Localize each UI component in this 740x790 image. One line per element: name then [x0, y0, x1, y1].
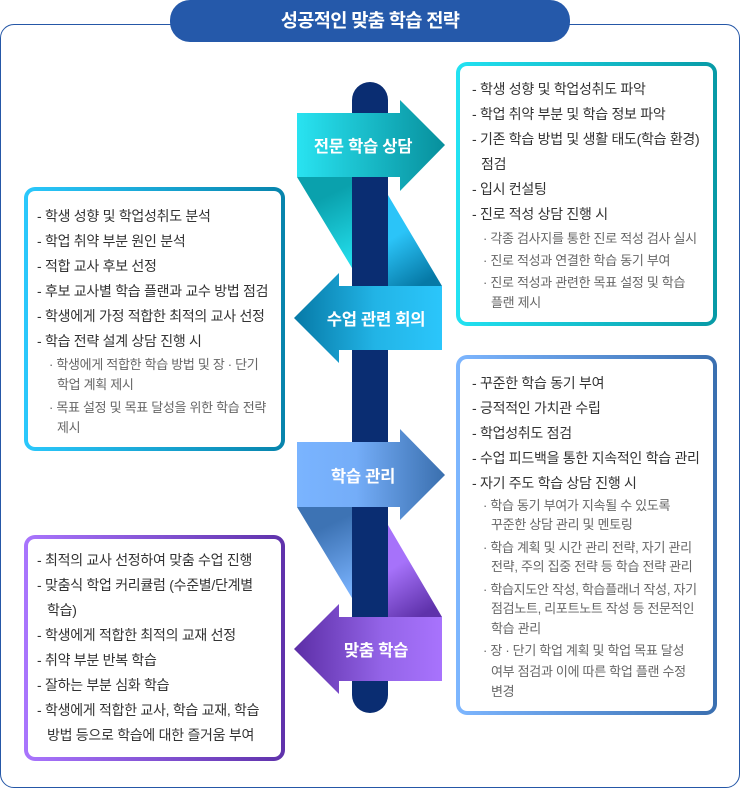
text block: 학습 관리 내용: - 긍적적인 가치관 수립: [472, 400, 601, 416]
fold: 전문 학습 상담: [297, 177, 352, 268]
text block: 맞춤 학습 내용: - 학생에게 적합한 최적의 교재 선정: [37, 627, 236, 643]
text block: 학습 관리 내용: 점검노트, 리포트노트 작성 등 전문적인: [491, 601, 694, 616]
text block: 전문 학습 상담 내용: · 각종 검사지를 통한 진로 적성 검사 실시: [483, 231, 697, 246]
text block: 수업 관련 회의 내용: [37, 208, 268, 435]
text block: 맞춤 학습 내용: 학습): [47, 602, 77, 618]
signpost pole: [352, 82, 388, 713]
text block: 수업 관련 회의 내용: - 학생에게 가정 적합한 최적의 교사 선정: [37, 308, 265, 324]
text block: 수업 관련 회의 내용: 제시: [57, 420, 80, 435]
text block: 맞춤 학습 내용: - 학생에게 적합한 교사, 학습 교재, 학습: [37, 702, 259, 718]
text block: 학습 관리 내용: 꾸준한 상담 관리 및 멘토링: [491, 517, 633, 532]
panel: 수업 관련 회의: [24, 187, 285, 451]
arrow: 전문 학습 상담: 전문 학습 상담: [314, 137, 412, 156]
text block: 맞춤 학습 내용: - 최적의 교사 선정하여 맞춤 수업 진행: [37, 552, 252, 568]
title: [170, 0, 570, 42]
text block: 전문 학습 상담 내용: - 진로 적성 상담 진행 시: [472, 206, 608, 222]
text block: 학습 관리 내용: - 학업성취도 점검: [472, 425, 572, 441]
text block: 학습 관리 내용: · 학습 동기 부여가 지속될 수 있도록: [483, 498, 670, 513]
text block: 학습 관리 내용: 여부 점검과 이에 따른 학업 플랜 수정: [491, 664, 686, 679]
text block: 학습 관리 내용: 전략, 주의 집중 전략 등 학습 전략 관리: [491, 559, 692, 574]
arrow: 학습 관리: [297, 429, 445, 520]
text block: 전문 학습 상담 내용: - 학업 취약 부분 및 학습 정보 파악: [472, 106, 665, 122]
text block: 학습 관리 내용: 학습 관리: [491, 621, 541, 636]
text block: 수업 관련 회의 내용: · 학생에게 적합한 학습 방법 및 장 · 단기: [49, 357, 258, 372]
text block: 맞춤 학습 내용: [37, 552, 259, 743]
fold: 수업 관련 회의: [388, 195, 442, 286]
arrow: 학습 관리: 학습 관리: [331, 467, 395, 486]
text block: 수업 관련 회의 내용: · 목표 설정 및 목표 달성을 위한 학습 전략: [49, 400, 266, 415]
text block: 학습 관리 내용: 변경: [491, 684, 514, 699]
arrow: 전문 학습 상담: [297, 100, 445, 191]
title: 성공적인 맞춤 학습 전략: [281, 10, 459, 31]
text block: 전문 학습 상담 내용: - 학생 성향 및 학업성취도 파악: [472, 81, 646, 97]
panel: 학습 관리: [456, 355, 717, 715]
text block: 맞춤 학습 내용: - 잘하는 부분 심화 학습: [37, 677, 169, 693]
panel: 맞춤 학습: [24, 535, 285, 761]
text block: 수업 관련 회의 내용: - 학생 성향 및 학업성취도 분석: [37, 208, 211, 224]
text block: 수업 관련 회의 내용: - 학습 전략 설계 상담 진행 시: [37, 333, 202, 349]
text block: 수업 관련 회의 내용: 학업 계획 제시: [57, 377, 134, 392]
text block: 학습 관리 내용: - 자기 주도 학습 상담 진행 시: [472, 475, 637, 491]
arrow: 수업 관련 회의: 수업 관련 회의: [327, 310, 425, 329]
fold: 학습 관리: [297, 507, 352, 598]
arrow: 맞춤 학습: 맞춤 학습: [344, 641, 408, 660]
arrow: 맞춤 학습: [294, 604, 442, 694]
text block: 수업 관련 회의 내용: - 적합 교사 후보 선정: [37, 258, 157, 274]
fold: 맞춤 학습: [388, 525, 442, 617]
text block: 전문 학습 상담 내용: 점검: [481, 156, 506, 172]
text block: 맞춤 학습 내용: - 맞춤식 학업 커리큘럼 (수준별/단계별: [37, 577, 253, 593]
text block: 학습 관리 내용: - 수업 피드백을 통한 지속적인 학습 관리: [472, 450, 700, 466]
text block: 전문 학습 상담 내용: - 기존 학습 방법 및 생활 태도(학습 환경): [472, 131, 699, 147]
text block: 수업 관련 회의 내용: - 후보 교사별 학습 플랜과 교수 방법 점검: [37, 283, 268, 299]
text block: 학습 관리 내용: · 학습지도안 작성, 학습플래너 작성, 자기: [483, 582, 697, 597]
text block: 학습 관리 내용: - 꾸준한 학습 동기 부여: [472, 375, 604, 391]
arrow: 수업 관련 회의: [294, 273, 442, 363]
text block: 맞춤 학습 내용: 방법 등으로 학습에 대한 즐거움 부여: [47, 727, 254, 743]
text block: 전문 학습 상담 내용: - 입시 컨설팅: [472, 181, 547, 197]
text block: 수업 관련 회의 내용: - 학업 취약 부분 원인 분석: [37, 233, 185, 249]
text block: 학습 관리 내용: [472, 375, 700, 699]
text block: 전문 학습 상담 내용: 플랜 제시: [491, 295, 541, 310]
text block: 전문 학습 상담 내용: [472, 81, 699, 310]
text block: 학습 관리 내용: · 장 · 단기 학업 계획 및 학업 목표 달성: [483, 643, 684, 658]
text block: 학습 관리 내용: · 학습 계획 및 시간 관리 전략, 자기 관리: [483, 540, 692, 555]
text block: 맞춤 학습 내용: - 취약 부분 반복 학습: [37, 652, 157, 668]
panel: 전문 학습 상담: [456, 62, 717, 326]
text block: 전문 학습 상담 내용: · 진로 적성과 관련한 목표 설정 및 학습: [483, 275, 685, 290]
text block: 전문 학습 상담 내용: · 진로 적성과 연결한 학습 동기 부여: [483, 253, 670, 268]
